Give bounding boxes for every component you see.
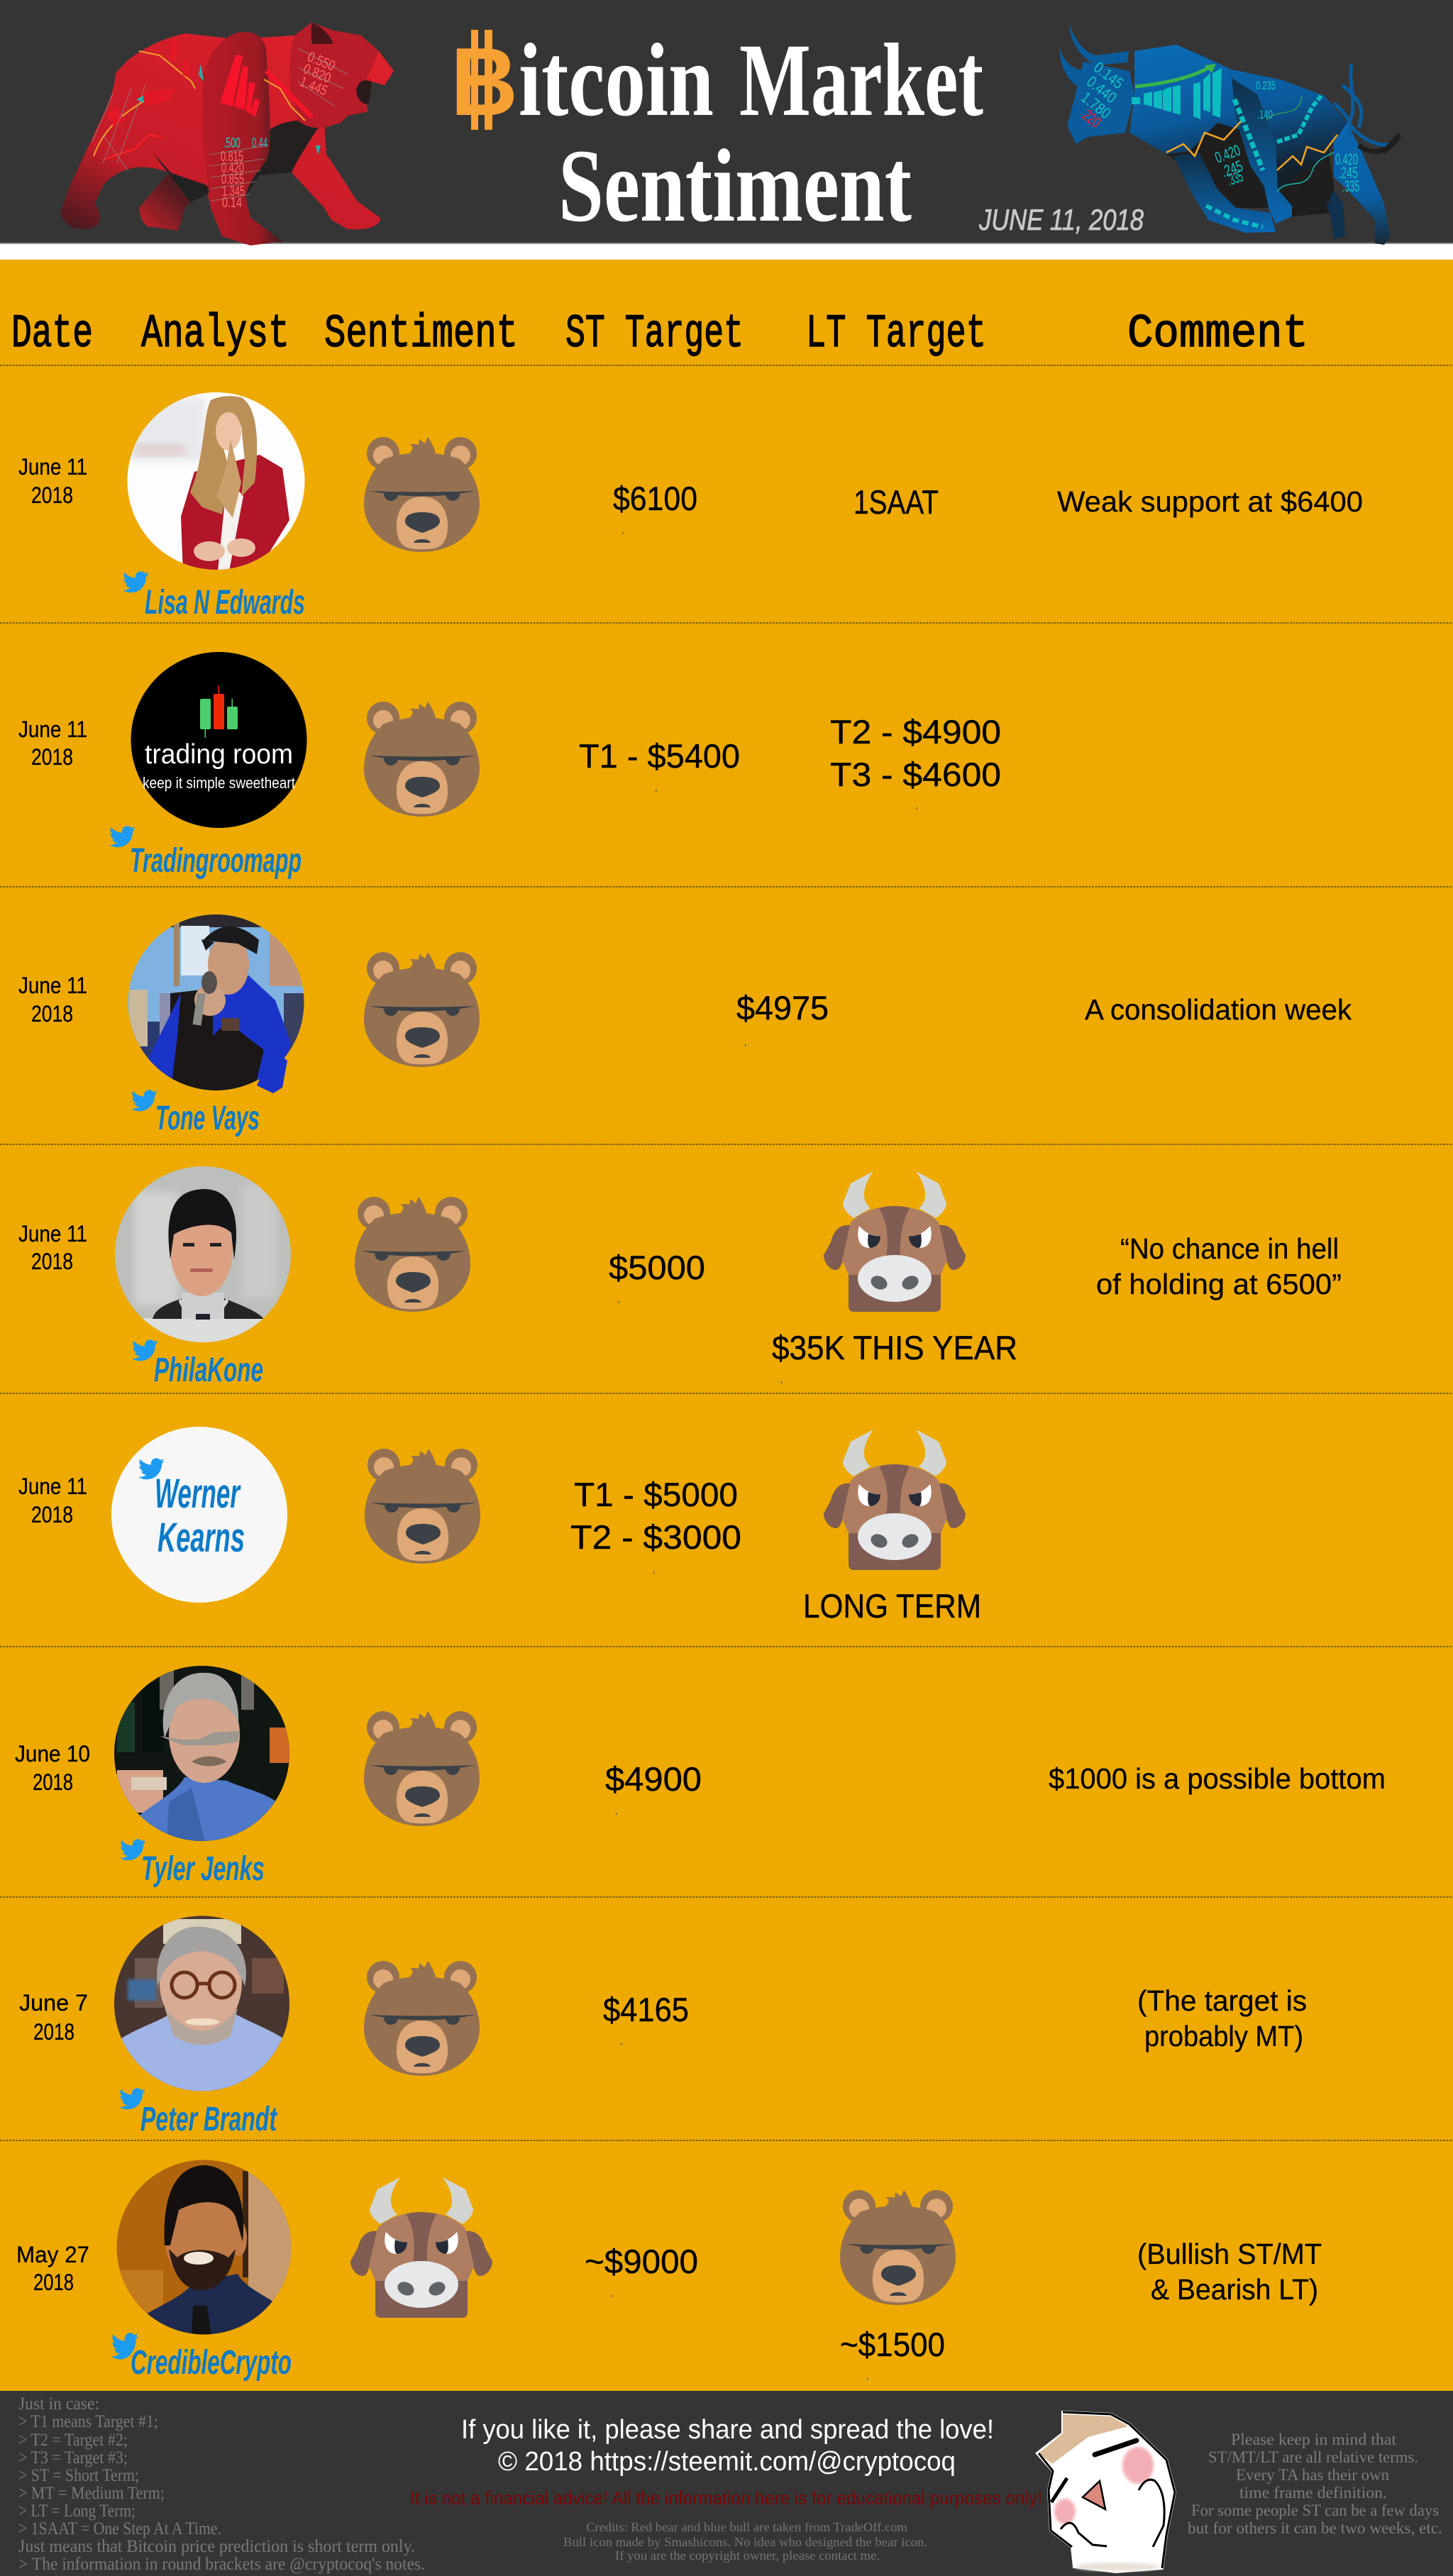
ticker numbers on bear: [221, 49, 337, 211]
row: Werner Kearns: 2018: [31, 1502, 73, 1527]
footer: share message: If you like it, please share and spread the love!: [461, 2415, 994, 2445]
footer: glossary: [18, 2394, 425, 2574]
title: Market: [739, 22, 983, 138]
footer: note on terms: Every TA has their own: [1236, 2466, 1389, 2484]
row: Peter Brandt: probably MT): [1144, 2020, 1303, 2052]
ticker numbers on bull: .335: [1225, 167, 1245, 189]
row: Tyler Jenks: 2018: [33, 1769, 73, 1795]
ticker numbers on bull: .245: [1219, 157, 1245, 181]
LT target: T2 - $4900: [830, 713, 1001, 751]
icon: twitter: [120, 1839, 146, 1860]
title: itcoin: [519, 22, 714, 138]
row: Peter Brandt: 2018: [33, 2019, 74, 2045]
table column headers: Sentiment: [324, 307, 518, 360]
icon: bitcoin B: B: [451, 28, 518, 136]
handle: Werner: [155, 1471, 241, 1517]
ticker numbers on bear: 0.14: [222, 195, 242, 211]
comment: (Bullish ST/MT: [1137, 2238, 1322, 2270]
row: Peter Brandt: June 7: [19, 1990, 88, 2016]
row: PhilaKone: [18, 1163, 1342, 1389]
header band: [0, 0, 1453, 260]
footer: glossary: Just in case:: [18, 2394, 99, 2414]
table column headers: LT Target: [806, 307, 986, 360]
row: Tone Vays: June 11: [18, 973, 87, 998]
row: CredibleCrypto: May 27: [16, 2242, 89, 2267]
target: $4975: [736, 989, 829, 1027]
handle: [155, 1471, 245, 1561]
footer: glossary: > ST = Short Term;: [18, 2466, 139, 2485]
ST target: $6100: [613, 480, 697, 517]
ticker numbers on bull: [1078, 58, 1359, 195]
icon: bear: [364, 952, 480, 1067]
logo: trading room: trading room: [145, 739, 293, 770]
portrait: Tyler: [110, 1664, 294, 1845]
comment: $1000 is a possible bottom: [1049, 1762, 1386, 1795]
ticker numbers on bear: 0.820: [301, 61, 333, 87]
comment: “No chance in hell: [1120, 1232, 1339, 1265]
footer: note on terms: ST/MT/LT are all relative terms.: [1208, 2448, 1418, 2466]
mascot character: [1037, 2412, 1175, 2572]
footer: glossary: > T1 means Target #1;: [18, 2412, 158, 2431]
ticker numbers on bear: 0.44: [252, 136, 267, 151]
portrait: Phila: [114, 1163, 294, 1347]
icon: twitter: [132, 1339, 158, 1361]
illustration: blue bull: [1060, 24, 1399, 245]
comment: (The target is: [1137, 1984, 1307, 2017]
portrait: Tone: [128, 914, 304, 1093]
row: Lisa N Edwards: June 11: [18, 454, 87, 480]
footer: share message: [461, 2415, 994, 2477]
ST target: T1 - $5000: [574, 1476, 738, 1513]
table column headers: [11, 307, 1308, 360]
row: Werner Kearns: [18, 1427, 981, 1625]
icon: bear: [364, 1711, 480, 1826]
icon: bull: [350, 2177, 492, 2318]
icon: bear: [365, 1449, 480, 1564]
icon: twitter: [123, 571, 149, 592]
ST target: $4165: [603, 1991, 689, 2028]
ticker numbers on bull: 0.420: [1335, 150, 1358, 168]
footer: glossary: > T2 = Target #2;: [18, 2431, 128, 2450]
icon: bear: [364, 437, 480, 552]
ticker numbers on bull: 1.780: [1078, 88, 1115, 122]
row: Werner Kearns: June 11: [18, 1474, 87, 1499]
handle: Tone Vays: [155, 1100, 260, 1137]
footer: note on terms: For some people ST can be a few days: [1191, 2502, 1439, 2519]
title: [451, 22, 983, 243]
footer: glossary: > LT = Long Term;: [18, 2502, 136, 2521]
handle: Peter Brandt: [140, 2101, 277, 2138]
footer: note on terms: [1188, 2431, 1442, 2537]
ST target: T2 - $3000: [570, 1518, 741, 1556]
footer: credits: If you are the copyright owner, please contact me.: [615, 2548, 880, 2563]
LT target: ~$1500: [840, 2326, 945, 2363]
footer: disclaimer: It is not a financial advice! All the information here is for educational purposes only!: [410, 2487, 1042, 2509]
icon: bull: [824, 1171, 966, 1312]
ticker numbers on bear: 1.445: [297, 74, 329, 99]
handle: Tradingroomapp: [130, 842, 302, 880]
row: CredibleCrypto: 2018: [33, 2270, 74, 2295]
footer: glossary: > T3 = Target #3;: [18, 2448, 128, 2467]
ticker numbers on bull: 0.235: [1256, 79, 1276, 92]
icon: bull: [824, 1430, 966, 1570]
handle: Tyler Jenks: [141, 1850, 265, 1888]
ticker numbers on bull: 0.420: [1212, 141, 1243, 167]
row: Tradingroomapp: [18, 652, 1001, 880]
icon: bear: [840, 2190, 956, 2305]
logo: trading room: [131, 652, 306, 828]
ST target: [570, 1476, 741, 1574]
row: Tyler Jenks: June 10: [15, 1741, 90, 1767]
icon: bear: [355, 1197, 470, 1312]
portrait: Werner placeholder: [111, 1427, 287, 1603]
ticker numbers on bear: 0.855: [221, 172, 244, 187]
ticker numbers on bull: .335: [1342, 177, 1359, 195]
row: Tone Vays: 2018: [31, 1001, 73, 1027]
footer: note on terms: but for others it can be two weeks, etc.: [1188, 2519, 1442, 2537]
footer: note on terms: Please keep in mind that: [1231, 2431, 1397, 2448]
footer: note on terms: time frame definition.: [1239, 2484, 1387, 2502]
icon: twitter: [109, 826, 136, 847]
portrait: Peter: [110, 1912, 294, 2096]
ST target: ~$9000: [585, 2243, 698, 2280]
row: Peter Brandt: [19, 1912, 1307, 2138]
row: Tone Vays: [18, 912, 1352, 1137]
handle: Lisa N Edwards: [145, 584, 305, 621]
ST target: T1 - $5400: [579, 737, 740, 775]
title: Sentiment: [558, 128, 912, 243]
ticker numbers on bear: 0.420: [221, 160, 244, 176]
row: Lisa N Edwards: 2018: [31, 482, 73, 508]
ticker numbers on bear: 0.815: [221, 149, 243, 165]
footer: credits: Credits: Red bear and blue bull are taken from TradeOff.com: [586, 2520, 907, 2534]
row: Lisa N Edwards: [18, 390, 1363, 621]
handle: CredibleCrypto: [131, 2344, 292, 2382]
portrait: Lisa: [128, 392, 305, 570]
handle: PhilaKone: [154, 1351, 263, 1389]
row: PhilaKone: 2018: [31, 1249, 73, 1274]
table column headers: Comment: [1127, 307, 1308, 360]
bull chart bars: [1132, 68, 1222, 119]
ticker numbers on bull: 0.145: [1090, 58, 1127, 92]
illustration: red bear: [60, 23, 394, 245]
ticker numbers on bull: .140: [1257, 108, 1273, 121]
row: Tyler Jenks: [15, 1664, 1386, 1888]
row: Tradingroomapp: 2018: [31, 744, 73, 770]
ST target: $5000: [609, 1249, 705, 1286]
LT target: $35K THIS YEAR: [772, 1329, 1017, 1366]
ticker numbers on bull: 0.440: [1083, 72, 1120, 106]
ticker numbers on bear: 1.345: [222, 184, 245, 199]
bull green arrow: [1135, 66, 1212, 87]
icon: bear: [364, 1961, 480, 2076]
icon: twitter: [111, 2333, 138, 2360]
icon: twitter: [119, 2088, 145, 2109]
icon: twitter: [138, 1458, 165, 1479]
footer: credits: [563, 2520, 927, 2563]
icon: twitter: [131, 1090, 158, 1111]
row: CredibleCrypto: [16, 2157, 1322, 2382]
row: CredibleCrypto: & Bearish LT): [1151, 2273, 1318, 2306]
row: Tradingroomapp: T3 - $4600: [830, 756, 1001, 793]
ticker numbers on bull: .245: [1338, 164, 1358, 182]
table column headers: Date: [11, 307, 93, 360]
ST target: $4900: [605, 1760, 702, 1798]
logo: trading room: keep it simple sweetheart: [143, 774, 295, 792]
portrait: Credible: [114, 2157, 294, 2338]
row: Tradingroomapp: June 11: [18, 717, 87, 742]
handle: Kearns: [158, 1515, 245, 1561]
footer band: [0, 2391, 1453, 2576]
ticker numbers on bear: .500: [223, 136, 241, 151]
bear trend arrow: [266, 71, 312, 117]
footer: glossary: > 1SAAT = One Step At A Time.: [18, 2519, 221, 2538]
footer: glossary: > MT = Medium Term;: [18, 2484, 165, 2503]
comment: A consolidation week: [1085, 993, 1352, 1026]
chart bars on bear: [220, 55, 260, 117]
row: PhilaKone: of holding at 6500”: [1096, 1268, 1342, 1300]
date label: JUNE 11, 2018: [978, 203, 1144, 236]
table column headers: ST Target: [565, 307, 744, 360]
LT target: 1SAAT: [853, 483, 939, 521]
ticker numbers on bull: 220: [1079, 106, 1105, 131]
footer: credits: Bull icon made by Smashicons. No idea who designed the bear icon.: [563, 2535, 927, 2549]
row: PhilaKone: June 11: [18, 1221, 87, 1246]
footer: glossary: > The information in round brackets are @cryptocoq's notes.: [18, 2555, 425, 2574]
footer: share message: © 2018 https://steemit.com/@cryptocoq: [498, 2447, 956, 2477]
comment: Weak support at $6400: [1057, 485, 1363, 518]
table column headers: Analyst: [141, 307, 289, 360]
footer: glossary: Just means that Bitcoin price prediction is short term only.: [18, 2537, 415, 2556]
icon: bear: [364, 702, 480, 817]
LT target: LONG TERM: [803, 1587, 981, 1625]
ticker numbers on bear: 0.550: [305, 49, 337, 74]
